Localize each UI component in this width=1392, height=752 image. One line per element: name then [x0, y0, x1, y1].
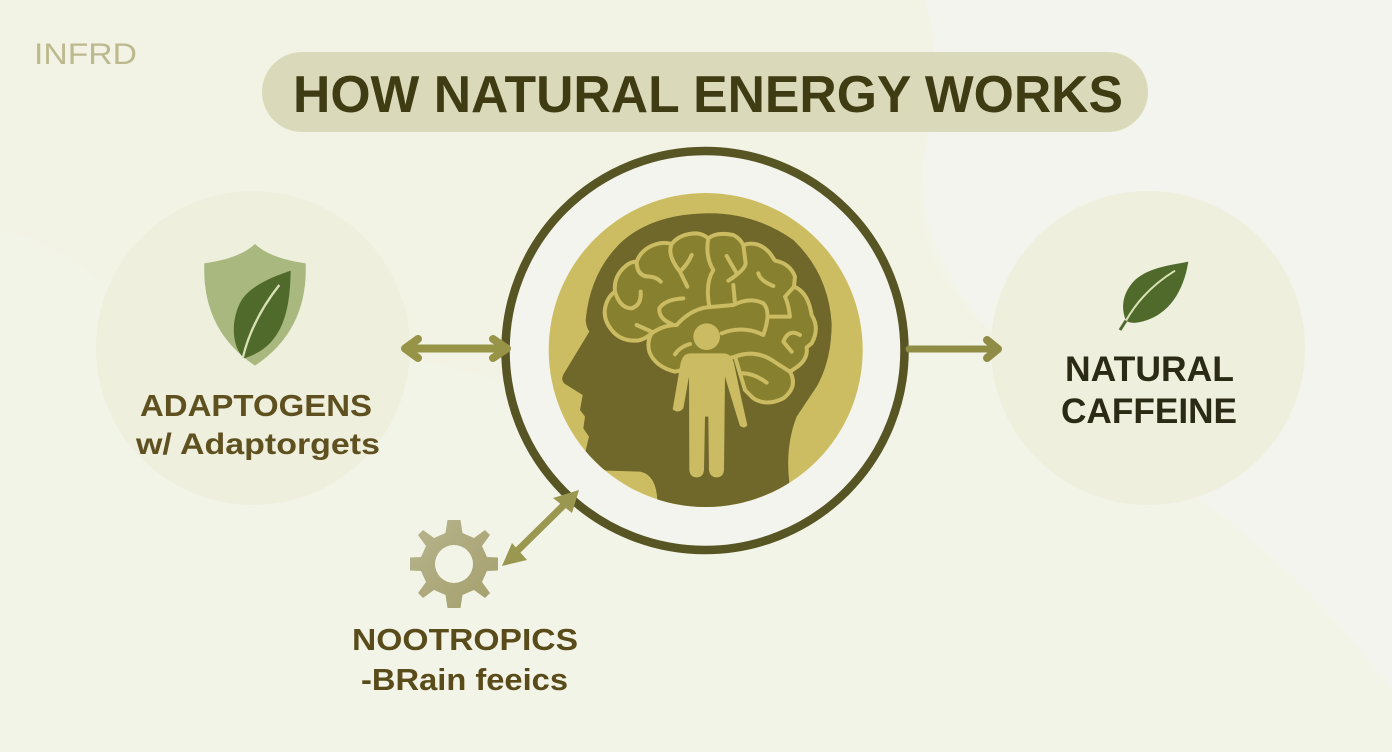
person figure	[673, 323, 747, 477]
central ring	[506, 151, 904, 550]
title pill: HOW NATURAL ENERGY WORKS	[293, 66, 1123, 124]
arrow: nootropics to brain	[502, 490, 579, 566]
panel: adaptogens	[96, 191, 410, 505]
arrow: brain to caffeine	[909, 340, 998, 358]
icon: shield with leaf	[204, 244, 306, 366]
heading: nootropics: NOOTROPICS	[352, 622, 578, 657]
heading: adaptogens: ADAPTOGENS	[140, 388, 372, 423]
title pill	[262, 52, 1148, 132]
head silhouette	[562, 213, 832, 527]
arrow: adaptogens to brain	[405, 339, 507, 358]
brain	[605, 233, 816, 402]
logo text: INFRD	[34, 38, 137, 71]
panel: natural caffeine	[991, 191, 1305, 505]
subheading: adaptogens: w/ Adaptorgets	[135, 428, 380, 461]
icon: leaf	[1120, 262, 1188, 330]
icon: head with brain and person	[549, 193, 863, 527]
heading: caffeine: CAFFEINE	[1061, 392, 1237, 431]
heading: natural: NATURAL	[1065, 350, 1234, 389]
subheading: nootropics: -BRain feeics	[361, 662, 568, 697]
icon: gear	[410, 520, 498, 608]
